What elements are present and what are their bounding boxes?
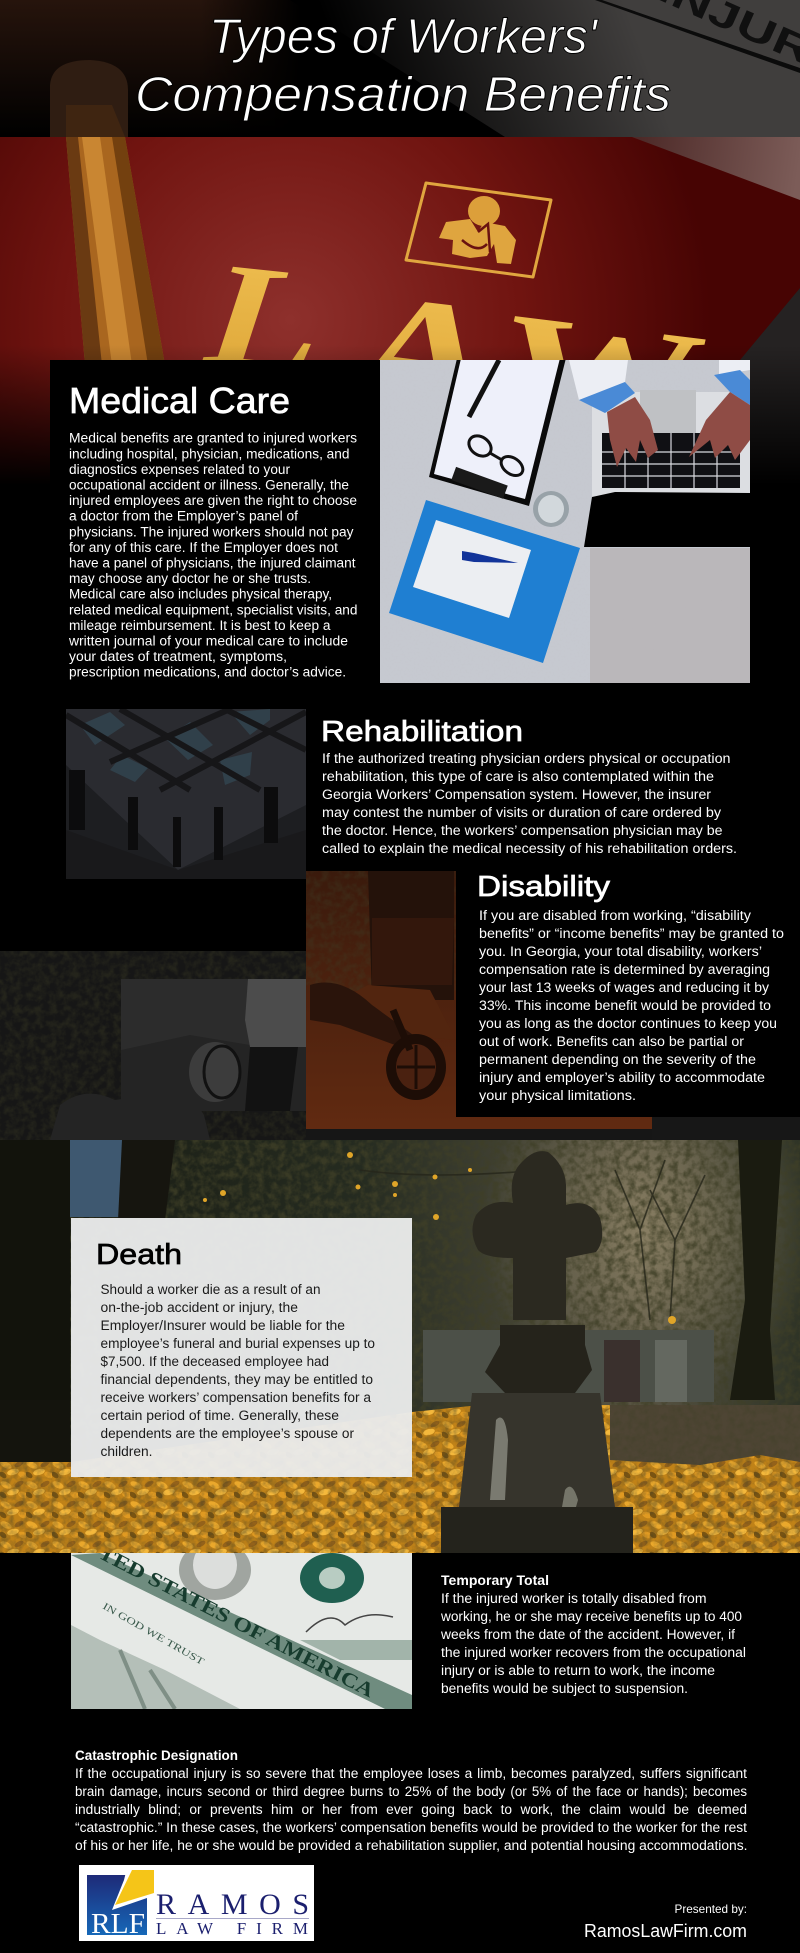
gold LAW lettering — [202, 266, 706, 360]
text block: medical care: Medical benefits are granted to injured workers — [69, 431, 357, 446]
text block: medical care: physicians. The injured workers should not pay — [69, 524, 354, 539]
text block: medical care: a doctor from the Employer’s panel of — [69, 509, 298, 524]
text block: disability: you as long as the doctor continues to keep you — [479, 1016, 777, 1031]
text block: disability: 33%. This income benefit would be provided to — [479, 998, 771, 1013]
heading: death: Death — [96, 1239, 182, 1271]
text block: medical care: your dates of treatment, symptoms, — [69, 649, 287, 664]
panel: death — [71, 1218, 412, 1477]
title: Types of Workers' — [209, 10, 599, 64]
text block: catastrophic designation: brain damage, incurs second or third degree burns to 25% of the body (or 5% of the face or hands); becomes — [75, 1784, 747, 1799]
crypt wall — [423, 1330, 714, 1402]
photo: building interior — [66, 709, 306, 879]
heading: medical care: Medical Care — [69, 380, 290, 421]
header photo: law book and gavel — [0, 137, 800, 491]
text block: rehabilitation — [322, 751, 737, 856]
text block: catastrophic designation: If the occupational injury is so severe that the employee loses a limb, becomes paralyzed, suffers significant — [75, 1766, 747, 1781]
text block: death: children. — [100, 1444, 152, 1459]
text block: medical care: have a panel of physicians, the injured claimant — [69, 556, 356, 570]
text block: medical care: Medical care also includes physical therapy, — [69, 587, 332, 602]
panel: medical care — [50, 360, 380, 683]
photo: dollar bill — [71, 1540, 412, 1712]
text block: disability: your physical limitations. — [479, 1088, 636, 1103]
heading: disability: Disability — [477, 871, 611, 903]
text block: disability: your last 13 weeks of wages and reducing it by — [479, 980, 769, 995]
logo: Ramos Law Firm: LAW FIRM — [156, 1919, 308, 1938]
text block: medical care: occupational accident or illness. Generally, the — [69, 478, 349, 492]
text block: death: financial dependents, they may be entitled to — [100, 1372, 373, 1387]
text block: rehabilitation: called to explain the medical necessity of his rehabilitation orders. — [322, 841, 737, 856]
text block: catastrophic designation: of his or her life, he or she would be provided a rehabilitation supplier, and potential housing accommodations. — [75, 1838, 748, 1853]
header dark band behind title — [0, 0, 800, 137]
text block: disability: If you are disabled from working, “disability — [479, 908, 751, 923]
heading: rehabilitation: Rehabilitation — [321, 716, 523, 748]
text block: temporary total: the injured worker recovers from the occupational — [441, 1645, 746, 1660]
text block: temporary total: Temporary Total — [441, 1573, 549, 1588]
text block: medical care: written journal of your medical care to include — [68, 634, 348, 648]
text block: temporary total: benefits would be subject to suspension. — [441, 1681, 688, 1696]
text block: disability: you. In Georgia, your total disability, workers’ — [479, 944, 762, 959]
fallen leaves — [0, 1400, 800, 1553]
logo: Ramos Law Firm: RAMOS — [156, 1888, 309, 1921]
text block: temporary total: weeks from the date of the accident. However, if — [440, 1627, 735, 1642]
text block: medical care: related medical equipment, specialist visits, and — [69, 602, 358, 617]
logo: Ramos Law Firm: RLF — [91, 1909, 145, 1940]
text block: catastrophic designation — [75, 1748, 748, 1853]
text block: death: on-the-job accident or injury, the — [100, 1300, 298, 1315]
text block: medical care: prescription medications, and doctor’s advice. — [69, 665, 346, 680]
text block: disability: injury and employer’s ability to accommodate — [479, 1070, 765, 1085]
photo: dollar bill: IN GOD WE TRUST — [101, 1601, 206, 1668]
text block: rehabilitation: may contest the number of visits or duration of care ordered by — [322, 805, 721, 820]
gold LAW lettering: A — [336, 262, 514, 440]
text block: temporary total: If the injured worker is totally disabled from — [441, 1591, 706, 1606]
text block: medical care: including hospital, physician, medications, and — [69, 446, 350, 461]
text block: temporary total: injury or is able to return to work, the income — [441, 1663, 715, 1678]
text block: catastrophic designation: Catastrophic Designation — [75, 1748, 238, 1763]
stone cross monument — [441, 1151, 633, 1553]
gold LAW lettering: L — [189, 233, 350, 406]
title: Compensation Benefits — [135, 68, 671, 122]
text block: medical care: mileage reimbursement. It is best to keep a — [69, 618, 331, 633]
presented by credit: RamosLawFirm.com — [584, 1921, 747, 1941]
text block: disability: permanent depending on the severity of the — [479, 1052, 756, 1067]
photo: dollar bill: TED STATES OF AMERICA — [95, 1542, 378, 1703]
text block: catastrophic designation: industrially blind; or prevents him or her from ever going back to work, the claim would be deemed — [75, 1802, 747, 1817]
text block: death: receive workers’ compensation benefits for a — [100, 1390, 371, 1405]
presented by credit — [584, 1902, 747, 1941]
text block: death: $7,500. If the deceased employee had — [100, 1354, 329, 1369]
text block: rehabilitation: If the authorized treating physician orders physical or occupation — [322, 751, 730, 766]
text block: death: dependents are the employee’s spouse or — [100, 1426, 354, 1441]
text block: death — [100, 1282, 375, 1459]
text block: medical care: injured employees are given the right to choose — [69, 493, 357, 508]
logo: Ramos Law Firm — [79, 1865, 314, 1941]
text block: medical care: for any of this care. If the Employer does not — [69, 540, 338, 555]
text block: disability: out of work. Benefits can also be partial or — [479, 1034, 745, 1049]
gold badge with injured worker icon — [406, 183, 551, 277]
text block: temporary total — [440, 1573, 746, 1696]
text block: temporary total: working, he or she may receive benefits up to 400 — [440, 1609, 742, 1624]
photo: cemetery with stone cross — [0, 1140, 800, 1553]
text block: medical care — [68, 431, 358, 680]
gold LAW lettering: W — [482, 282, 717, 469]
text block: death: employee’s funeral and burial expenses up to — [100, 1336, 375, 1351]
background photo: wheelchair texture — [0, 951, 800, 1140]
text block: rehabilitation: rehabilitation, this type of care is also contemplated within the — [322, 769, 714, 784]
text block: catastrophic designation: “catastrophic.” In these cases, the workers’ compensation benefits would be provided to the worker for the rest — [75, 1820, 747, 1835]
photo: person beside wheelchair — [121, 979, 306, 1111]
text block: death: Should a worker die as a result of an — [100, 1282, 320, 1297]
text block: death: Employer/Insurer would be liable for the — [100, 1318, 345, 1333]
presented by credit: Presented by: — [674, 1902, 747, 1916]
text block: disability — [479, 908, 784, 1103]
text block: rehabilitation: the doctor. Hence, the workers’ compensation physician may be — [322, 823, 722, 838]
text block: medical care: diagnostics expenses related to your — [69, 462, 290, 477]
panel: disability — [456, 871, 800, 1117]
title — [135, 10, 671, 122]
text block: rehabilitation: Georgia Workers’ Compensation system. However, the insurer — [322, 787, 712, 802]
text block: death: certain period of time. Generally, these — [100, 1408, 339, 1423]
text block: disability: benefits” or “income benefits” may be granted to — [479, 926, 784, 941]
text block: medical care: may choose any doctor he or she trusts. — [69, 571, 311, 586]
text block: disability: compensation rate is determined by averaging — [479, 962, 770, 977]
photo: wheelchair footrest — [306, 871, 652, 1129]
photo: desk with clipboard, folder and laptop — [380, 350, 750, 683]
